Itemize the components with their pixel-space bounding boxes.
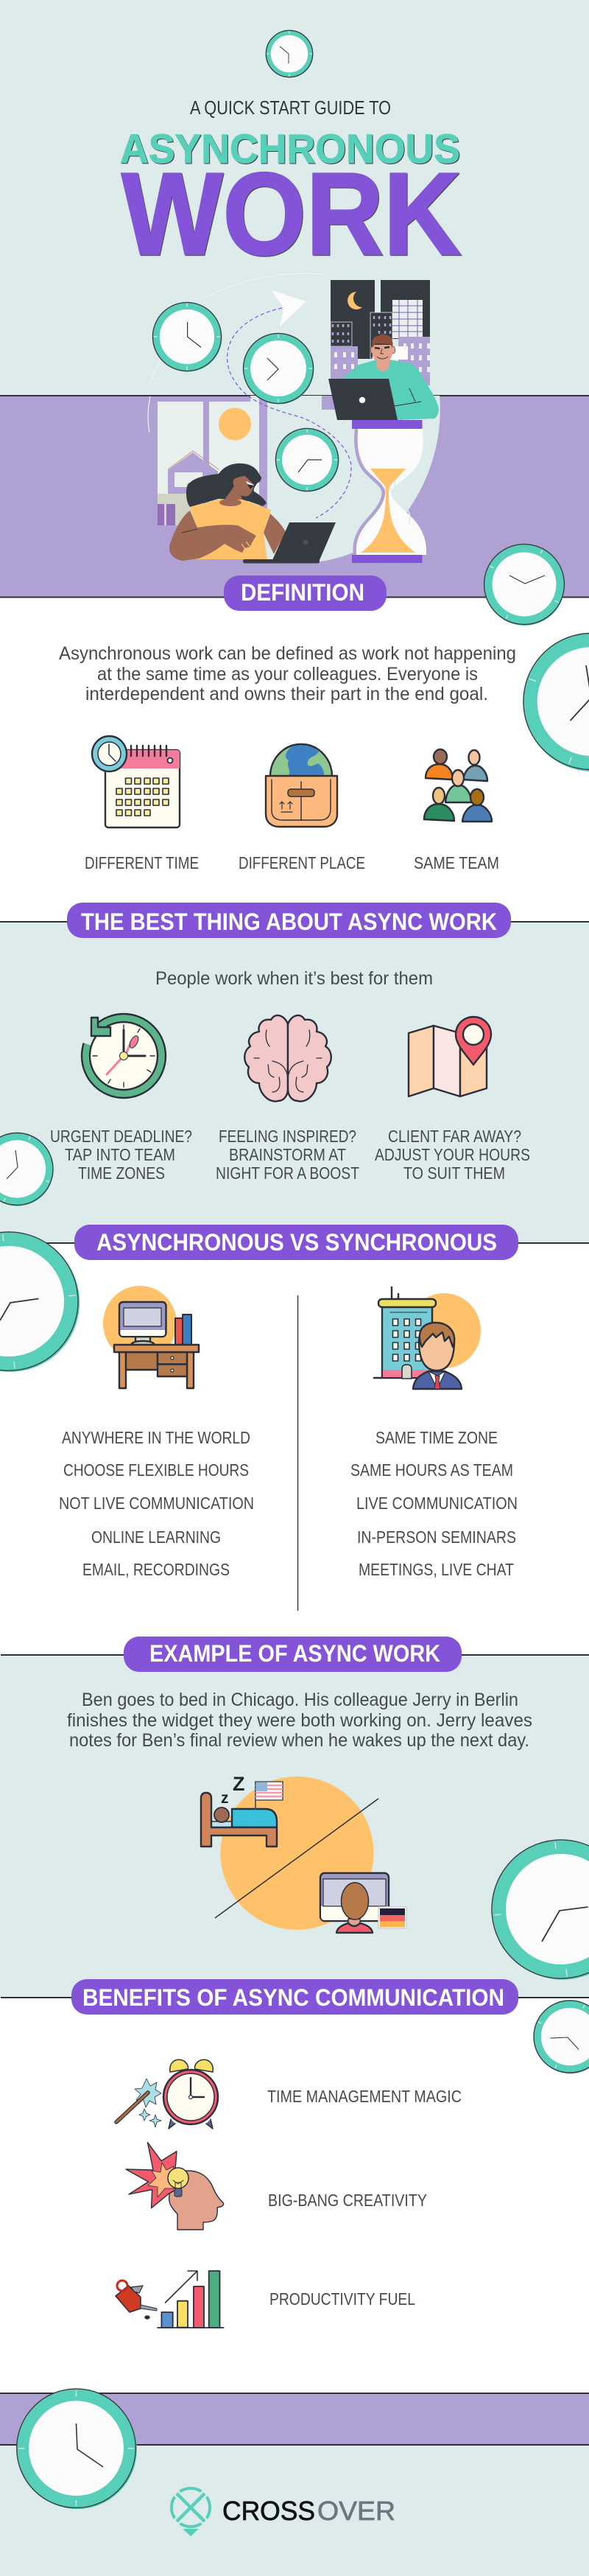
section: definition xyxy=(59,575,516,872)
example paragraph: finishes the widget they were both working on. Jerry leaves xyxy=(67,1710,532,1731)
logo mark xyxy=(172,2488,210,2536)
heading: best thing xyxy=(67,903,511,938)
icon: map with pin xyxy=(409,1017,491,1096)
labels: benefits: PRODUCTIVITY FUEL xyxy=(269,2289,415,2309)
labels: feeling inspired: FEELING INSPIRED? xyxy=(219,1127,356,1146)
list: synchronous traits: SAME TIME ZONE xyxy=(375,1428,498,1447)
clock: example right xyxy=(486,1834,589,1986)
clock: best thing left xyxy=(0,1122,65,1217)
man with laptop xyxy=(322,334,439,420)
definition paragraph: interdependent and owns their part in the end goal. xyxy=(85,684,488,704)
example paragraph xyxy=(67,1690,532,1751)
icon: person at computer xyxy=(320,1873,406,1933)
definition paragraph: at the same time as your colleagues. Everyone is xyxy=(97,664,478,685)
labels: benefits xyxy=(267,2087,462,2309)
definition paragraph: Asynchronous work can be defined as work not happening xyxy=(59,643,516,664)
labels: urgent deadline: URGENT DEADLINE? xyxy=(50,1127,192,1146)
heading: vs: ASYNCHRONOUS VS SYNCHRONOUS xyxy=(96,1229,497,1256)
clock: hero lower xyxy=(275,428,339,491)
labels: urgent deadline: TIME ZONES xyxy=(78,1163,165,1183)
divider diagonal xyxy=(215,1799,378,1918)
example paragraph: Ben goes to bed in Chicago. His colleague Jerry in Berlin xyxy=(82,1690,518,1710)
section: benefits xyxy=(71,1979,518,2328)
section: example xyxy=(67,1637,532,1933)
z letters xyxy=(221,1773,244,1807)
labels: benefits: BIG-BANG CREATIVITY xyxy=(268,2191,427,2210)
z letters: Z xyxy=(233,1773,244,1795)
list: asynchronous traits: EMAIL, RECORDINGS xyxy=(82,1560,230,1579)
heading: best thing: THE BEST THING ABOUT ASYNC WORK xyxy=(81,909,497,935)
list: asynchronous traits xyxy=(59,1428,254,1579)
logo: crossover xyxy=(172,2488,395,2536)
clock: vs section left xyxy=(0,1226,85,1378)
icon: fuel can and bar chart xyxy=(116,2271,224,2328)
icon: globe in box xyxy=(266,744,337,827)
icon: brain xyxy=(244,1015,331,1102)
definition paragraph xyxy=(59,643,516,704)
labels: benefits: TIME MANAGEMENT MAGIC xyxy=(267,2087,462,2106)
title: asynchronous: ASYNCHRONOUS xyxy=(120,125,460,172)
section: best thing xyxy=(50,903,530,1183)
section: asynchronous vs synchronous xyxy=(59,1225,518,1611)
woman with laptop xyxy=(169,463,336,563)
labels: feeling inspired: BRAINSTORM AT xyxy=(229,1145,346,1164)
list: synchronous traits: MEETINGS, LIVE CHAT xyxy=(359,1560,514,1579)
clock: footer xyxy=(17,2389,137,2509)
heading: definition xyxy=(224,575,387,611)
paper plane and dashed path xyxy=(228,290,351,518)
list: asynchronous traits: ANYWHERE IN THE WORLD xyxy=(62,1428,250,1447)
icon: magic alarm clock xyxy=(116,2059,218,2129)
background blob xyxy=(250,396,440,562)
labels: client far away: TO SUIT THEM xyxy=(403,1163,505,1183)
labels: client far away: ADJUST YOUR HOURS xyxy=(375,1145,530,1164)
list: synchronous traits: IN-PERSON SEMINARS xyxy=(357,1527,516,1547)
clock: benefits right xyxy=(521,1989,589,2085)
icon: team xyxy=(424,749,492,822)
labels: urgent deadline: TAP INTO TEAM xyxy=(65,1145,175,1164)
icon: desk with computer xyxy=(103,1286,199,1388)
subheading: People work when it’s best for them xyxy=(155,968,433,989)
example paragraph: notes for Ben’s final review when he wakes up the next day. xyxy=(69,1730,529,1751)
title block xyxy=(120,97,461,279)
heading: benefits: BENEFITS OF ASYNC COMMUNICATION xyxy=(82,1984,504,2011)
labels: client far away: CLIENT FAR AWAY? xyxy=(388,1127,521,1146)
logo wordmark: CROSS xyxy=(222,2496,315,2526)
labels: SAME TEAM xyxy=(414,853,499,872)
clock: hero center xyxy=(243,333,314,404)
night city xyxy=(331,280,430,385)
list: synchronous traits: SAME HOURS AS TEAM xyxy=(350,1460,513,1480)
clock: top xyxy=(266,30,313,77)
subtitle: A QUICK START GUIDE TO xyxy=(190,97,391,119)
icon: sleeping person in bed xyxy=(201,1782,283,1847)
window with house xyxy=(158,396,267,525)
clock: definition right large xyxy=(504,614,589,791)
icon: exploding idea head xyxy=(126,2143,224,2230)
list: asynchronous traits: ONLINE LEARNING xyxy=(91,1527,221,1547)
heading: example: EXAMPLE OF ASYNC WORK xyxy=(149,1640,440,1667)
illustration: time zones xyxy=(201,1773,406,1933)
labels: feeling inspired: NIGHT FOR A BOOST xyxy=(216,1163,359,1183)
title: work: WORK xyxy=(121,148,461,279)
labels: urgent deadline xyxy=(50,1127,192,1183)
icon: clock with rewind arrow xyxy=(78,1014,166,1098)
icon: office building with businessman xyxy=(374,1287,481,1389)
clock: definition badge xyxy=(470,530,579,640)
hero illustration xyxy=(148,273,440,563)
clock: hero left xyxy=(152,302,222,371)
list: synchronous traits xyxy=(350,1428,518,1579)
labels: feeling inspired xyxy=(216,1127,359,1183)
z letters: z xyxy=(221,1790,228,1807)
list: synchronous traits: LIVE COMMUNICATION xyxy=(356,1494,518,1513)
labels xyxy=(85,853,499,872)
heading: definition: DEFINITION xyxy=(241,579,364,606)
hourglass xyxy=(352,420,426,563)
divider xyxy=(297,1295,299,1611)
labels: client far away xyxy=(375,1127,530,1183)
heading: vs xyxy=(74,1225,518,1260)
logo wordmark: OVER xyxy=(317,2496,395,2526)
heading: example xyxy=(124,1637,462,1672)
labels: DIFFERENT TIME xyxy=(85,853,199,872)
list: asynchronous traits: CHOOSE FLEXIBLE HOURS xyxy=(63,1460,249,1480)
list: asynchronous traits: NOT LIVE COMMUNICATION xyxy=(59,1494,254,1513)
icon: calendar with clock xyxy=(92,736,180,827)
logo wordmark xyxy=(222,2496,395,2526)
labels: DIFFERENT PLACE xyxy=(239,853,365,872)
